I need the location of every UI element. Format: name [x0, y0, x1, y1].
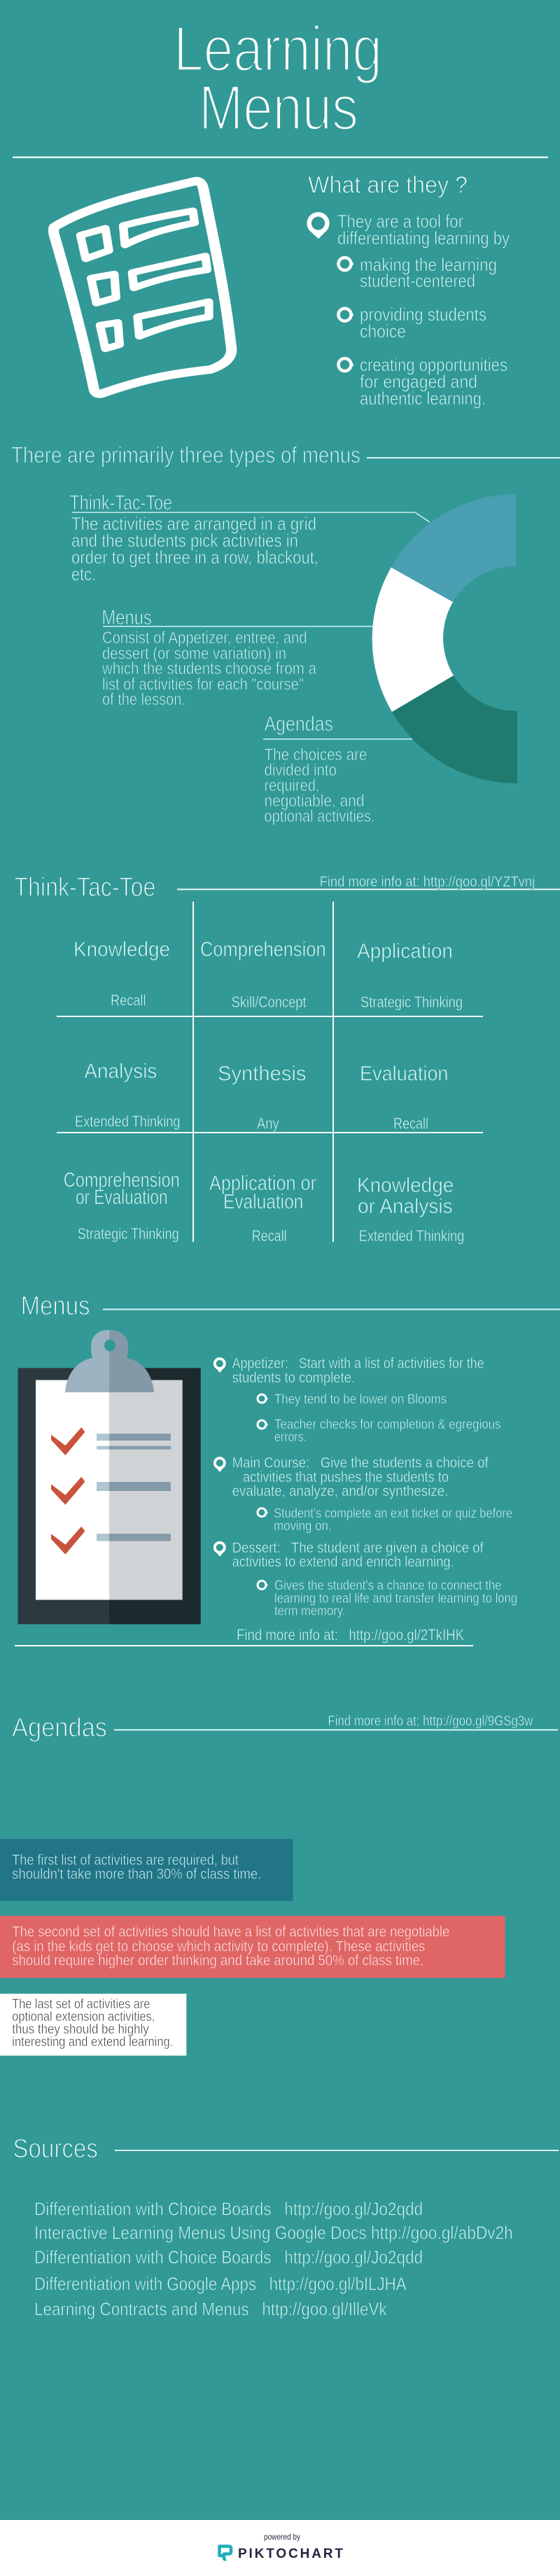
cell: comprehension or evaluation: Comprehension [64, 1168, 180, 1191]
list: sources: Differentiation with Choice Boards http://goo.gl/Jo2qdd [34, 2198, 423, 2219]
panel: negotiable activities: The second set of activities should have a list of activities that are negotiable [12, 1924, 449, 1940]
cell: evaluation: Evaluation [360, 1062, 448, 1085]
text: student choice: choice [360, 321, 406, 342]
cell: application or evaluation: Application or [209, 1172, 316, 1195]
text: student choice: providing students [360, 304, 486, 325]
text: exit ticket [274, 1506, 512, 1534]
icon: small pin [339, 358, 354, 371]
text: appetizer [232, 1356, 484, 1386]
description: negotiable, and [265, 792, 364, 811]
text: intro: They are a tool for [337, 211, 463, 232]
text: intro [337, 211, 510, 248]
description: The activities are arranged in a grid [71, 513, 316, 534]
panel: negotiable activities [0, 1916, 505, 1978]
text: teacher checks: errors. [274, 1430, 307, 1445]
cell: comprehension: Comprehension [200, 938, 326, 961]
cell: synthesis [218, 1062, 307, 1133]
connector line [103, 626, 373, 627]
text: teacher checks [274, 1418, 501, 1445]
footer: powered by piktochart: powered by [264, 2532, 300, 2542]
title: Learning [174, 14, 382, 85]
cell: knowledge: Knowledge [74, 938, 170, 961]
text: blooms: They tend to be lower on Blooms [274, 1392, 447, 1407]
icon: hand-drawn menu page [54, 181, 232, 394]
list: sources [34, 2198, 513, 2320]
description: which the students choose from a [102, 659, 317, 678]
icon: clipboard checklist [18, 1330, 201, 1624]
heading: sources: Sources [13, 2134, 98, 2164]
cell: synthesis: Any [257, 1115, 279, 1133]
text: student choice [360, 304, 486, 342]
cell: application [357, 939, 463, 1011]
heading: what are they: What are they ? [308, 172, 468, 199]
panel: optional activities: optional extension activities, [12, 2010, 155, 2024]
chart: three-part donut [372, 494, 517, 783]
cell: knowledge or analysis: Knowledge [357, 1174, 454, 1197]
description: Consist of Appetizer, entree, and [102, 629, 307, 648]
panel: negotiable activities: (as in the kids get to choose which activity to complete). These activities [12, 1938, 425, 1954]
panel: think-tac-toe type [70, 491, 430, 584]
icon: small pin [258, 1581, 268, 1589]
heading: menus: Menus [21, 1292, 90, 1321]
icon: piktochart logo [220, 2547, 231, 2559]
cell: comprehension or evaluation: or Evaluation [76, 1186, 168, 1209]
cell: application or evaluation: Evaluation [223, 1191, 303, 1214]
panel: menus type [102, 606, 373, 709]
text: exit ticket: Student's complete an exit ticket or quiz before [274, 1506, 512, 1521]
cell: analysis: Extended Thinking [75, 1113, 181, 1130]
link: think-tac-toe info: Find more info at: http://goo.gl/YZTvnj [320, 874, 535, 890]
text: real life: Gives the student's a chance to connect the [274, 1578, 501, 1593]
grid lines [57, 902, 483, 1242]
icon: large pin [309, 214, 327, 239]
text: real life: term memory. [274, 1604, 346, 1619]
icon: pin [215, 1458, 225, 1472]
icon: small pin [258, 1420, 268, 1429]
cell: knowledge or analysis [357, 1174, 464, 1245]
label: menus: Menus [102, 606, 152, 629]
panel: required activities: shouldn't take more than 30% of class time. [12, 1866, 261, 1882]
cell: knowledge: Recall [111, 992, 146, 1009]
icon: small pin [339, 258, 354, 270]
text: exit ticket: moving on. [274, 1519, 332, 1534]
description [102, 629, 317, 709]
text: main course: Main Course: Give the students a choice of [232, 1455, 489, 1471]
description: and the students pick activities in [71, 530, 298, 551]
text: real life: learning to real life and transfer learning to long [274, 1592, 517, 1606]
footer: powered by piktochart [0, 2520, 560, 2576]
icon: pin [215, 1359, 225, 1373]
text: opportunities: authentic learning. [360, 388, 486, 409]
cell: knowledge or analysis: Extended Thinking [359, 1227, 464, 1245]
panel: think-tac-toe grid [57, 902, 483, 1245]
panel: required activities: The first list of activities are required, but [12, 1852, 239, 1868]
text: real life [274, 1578, 517, 1619]
cell: analysis: Analysis [84, 1060, 157, 1083]
footer: powered by piktochart: PIKTOCHART [238, 2547, 343, 2561]
icon: small pin [258, 1394, 268, 1403]
label: agendas: Agendas [265, 713, 333, 736]
list: sources: Differentiation with Google Apps http://goo.gl/bILJHA [34, 2273, 407, 2294]
text: dessert [232, 1540, 484, 1570]
icon: pin [215, 1543, 225, 1557]
text: student centered: student-centered [360, 270, 475, 291]
text: intro: differentiating learning by [337, 227, 510, 248]
connector line [263, 738, 412, 740]
connector line [72, 512, 430, 522]
cell: comprehension or evaluation [64, 1168, 180, 1242]
panel: required activities [0, 1839, 293, 1901]
label: think-tac-toe: Think-Tac-Toe [70, 491, 172, 514]
description: of the lesson. [102, 690, 186, 709]
icon: small pin [258, 1508, 268, 1517]
description: The choices are [265, 746, 367, 764]
heading: agendas: Agendas [12, 1714, 107, 1743]
panel: negotiable activities: should require higher order thinking and take around 50% of class time. [12, 1952, 424, 1968]
cell: analysis [75, 1060, 181, 1130]
title: Menus [199, 73, 358, 144]
cell: application or evaluation [209, 1172, 316, 1245]
panel: optional activities [0, 1994, 186, 2056]
text: dessert: activities to extend and enrich learning. [232, 1554, 454, 1570]
panel: agendas type [263, 713, 412, 826]
cell: application: Application [357, 939, 453, 963]
text: opportunities: for engaged and [360, 371, 477, 392]
heading: three types of menus: There are primarily three types of menus [11, 442, 360, 468]
cell: knowledge or analysis: or Analysis [358, 1195, 453, 1218]
panel: optional activities: interesting and extend learning. [12, 2035, 173, 2050]
cell: evaluation [360, 1062, 448, 1133]
description: optional activities. [265, 807, 375, 826]
panel: menu courses [215, 1356, 517, 1619]
description: order to get three in a row, blackout, [71, 547, 318, 568]
heading: think-tac-toe: Think-Tac-Toe [14, 873, 155, 902]
cell: evaluation: Recall [393, 1115, 428, 1133]
text: main course: evaluate, analyze, and/or synthesize. [232, 1483, 448, 1499]
panel: what are they [308, 172, 510, 409]
icon: small pin [339, 309, 354, 321]
description: required, [265, 776, 319, 795]
cell: synthesis: Synthesis [218, 1062, 307, 1085]
text: teacher checks: Teacher checks for completion & egregious [274, 1418, 501, 1432]
text: main course: activities that pushes the students to [243, 1469, 449, 1485]
description: dessert (or some variation) in [102, 644, 286, 664]
cell: knowledge [74, 938, 170, 1009]
description [71, 513, 318, 584]
description: list of activities for each "course" [102, 675, 304, 694]
link: menus info: Find more info at: http://goo.gl/2TkIHK [237, 1626, 464, 1644]
cell: comprehension [200, 938, 326, 1011]
cell: application or evaluation: Recall [252, 1227, 287, 1245]
cell: comprehension: Skill/Concept [232, 993, 307, 1011]
text: dessert: Dessert: The student are given a choice of [232, 1540, 484, 1556]
description [265, 746, 375, 826]
description: etc. [71, 564, 96, 584]
text: student centered [360, 254, 497, 291]
cell: comprehension or evaluation: Strategic Thinking [78, 1225, 179, 1242]
text: appetizer: students to complete. [232, 1370, 355, 1386]
text: main course [232, 1455, 489, 1499]
text: student centered: making the learning [360, 254, 497, 275]
list: sources: Learning Contracts and Menus http://goo.gl/IlleVk [34, 2299, 387, 2320]
title [174, 14, 382, 144]
description: divided into [265, 761, 337, 780]
text: opportunities [360, 354, 507, 409]
text: opportunities: creating opportunities [360, 354, 507, 375]
list: sources: Differentiation with Choice Boards http://goo.gl/Jo2qdd [34, 2246, 423, 2267]
cell: application: Strategic Thinking [360, 993, 463, 1011]
panel: optional activities: thus they should be highly [12, 2022, 149, 2037]
text: appetizer: Appetizer: Start with a list of activities for the [232, 1356, 484, 1372]
panel: optional activities: The last set of activities are [12, 1997, 150, 2012]
